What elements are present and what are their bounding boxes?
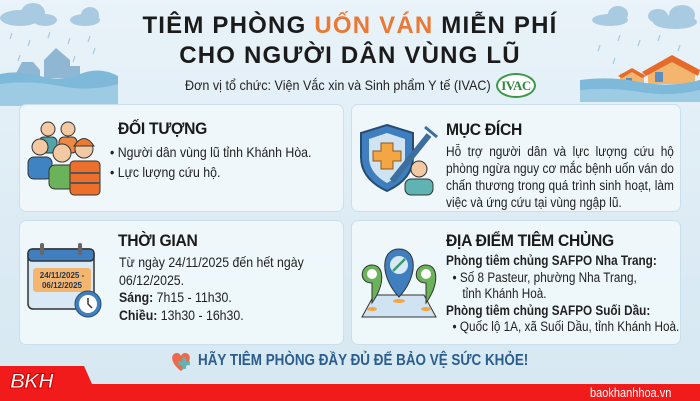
title: TIÊM PHÒNG UỐN VÁN MIỄN PHÍ: [142, 12, 558, 39]
schedule text: Sáng: 7h15 - 11h30.: [119, 289, 232, 305]
panel: muc dich: [351, 104, 681, 212]
schedule text: 06/12/2025.: [119, 272, 184, 288]
heading: ĐỐI TƯỢNG: [118, 119, 207, 138]
locations text: • Số 8 Pasteur, phường Nha Trang,: [453, 270, 637, 284]
schedule text: Từ ngày 24/11/2025 đến hết ngày: [119, 254, 304, 270]
heading: THỜI GIAN: [118, 231, 198, 250]
schedule text: Chiều: 13h30 - 16h30.: [119, 306, 244, 322]
heading: MỤC ĐÍCH: [446, 120, 522, 139]
icon: calendar with clock: 24/11/2025 -: [40, 271, 85, 280]
icon: calendar with clock: 06/12/2025: [42, 281, 83, 290]
icon: heart plus: [172, 353, 190, 371]
right flood illustration: [580, 5, 700, 102]
bullet list: • Lực lượng cứu hộ.: [110, 164, 220, 180]
callout: slogan: HÃY TIÊM PHÒNG ĐẦY ĐỦ ĐỂ BẢO VỆ SỨC KHỎE!: [198, 352, 528, 369]
title: CHO NGƯỜI DÂN VÙNG LŨ: [179, 42, 521, 69]
logo: IVAC: IVAC: [501, 78, 531, 93]
logo: BKH: BKH: [10, 370, 52, 393]
locations text: [446, 253, 679, 334]
website: baokhanhhoa.vn: [590, 386, 671, 400]
panel: thoi gian: [19, 220, 344, 345]
panel: dia diem: [351, 220, 681, 345]
locations text: Phòng tiêm chủng SAFPO Nha Trang:: [446, 253, 657, 268]
organizer subtitle: Đơn vị tổ chức: Viện Vắc xin và Sinh phẩm Y tế (IVAC): [185, 77, 491, 93]
bullet list: • Người dân vùng lũ tỉnh Khánh Hòa.: [110, 144, 311, 160]
locations text: Phòng tiêm chủng SAFPO Suối Dầu:: [446, 302, 650, 318]
title: [142, 11, 558, 69]
organizer subtitle: [185, 73, 536, 98]
description: Hỗ trợ người dân và lực lượng cứu hộ phòng ngừa nguy cơ mắc bệnh uốn ván do chấn thương trong quá trình sinh hoạt, làm việc và ứng cứu tại vùng ngập lũ.: [446, 144, 674, 210]
icon: map pins: [361, 248, 437, 318]
heading: ĐỊA ĐIỂM TIÊM CHỦNG: [446, 231, 614, 250]
icon: calendar with clock: [27, 243, 102, 318]
footer bar: [0, 366, 700, 401]
logo: IVAC: [496, 73, 536, 98]
bullet list: [110, 144, 311, 180]
left flood illustration: [0, 3, 118, 106]
locations text: • Quốc lộ 1A, xã Suối Dầu, tỉnh Khánh Hoà.: [453, 319, 679, 334]
icon: people: [28, 122, 100, 196]
locations text: tỉnh Khánh Hoà.: [462, 286, 547, 301]
schedule text: [119, 254, 304, 322]
panel: doi tuong: [19, 104, 344, 212]
icon: shield and syringe: [360, 124, 438, 196]
